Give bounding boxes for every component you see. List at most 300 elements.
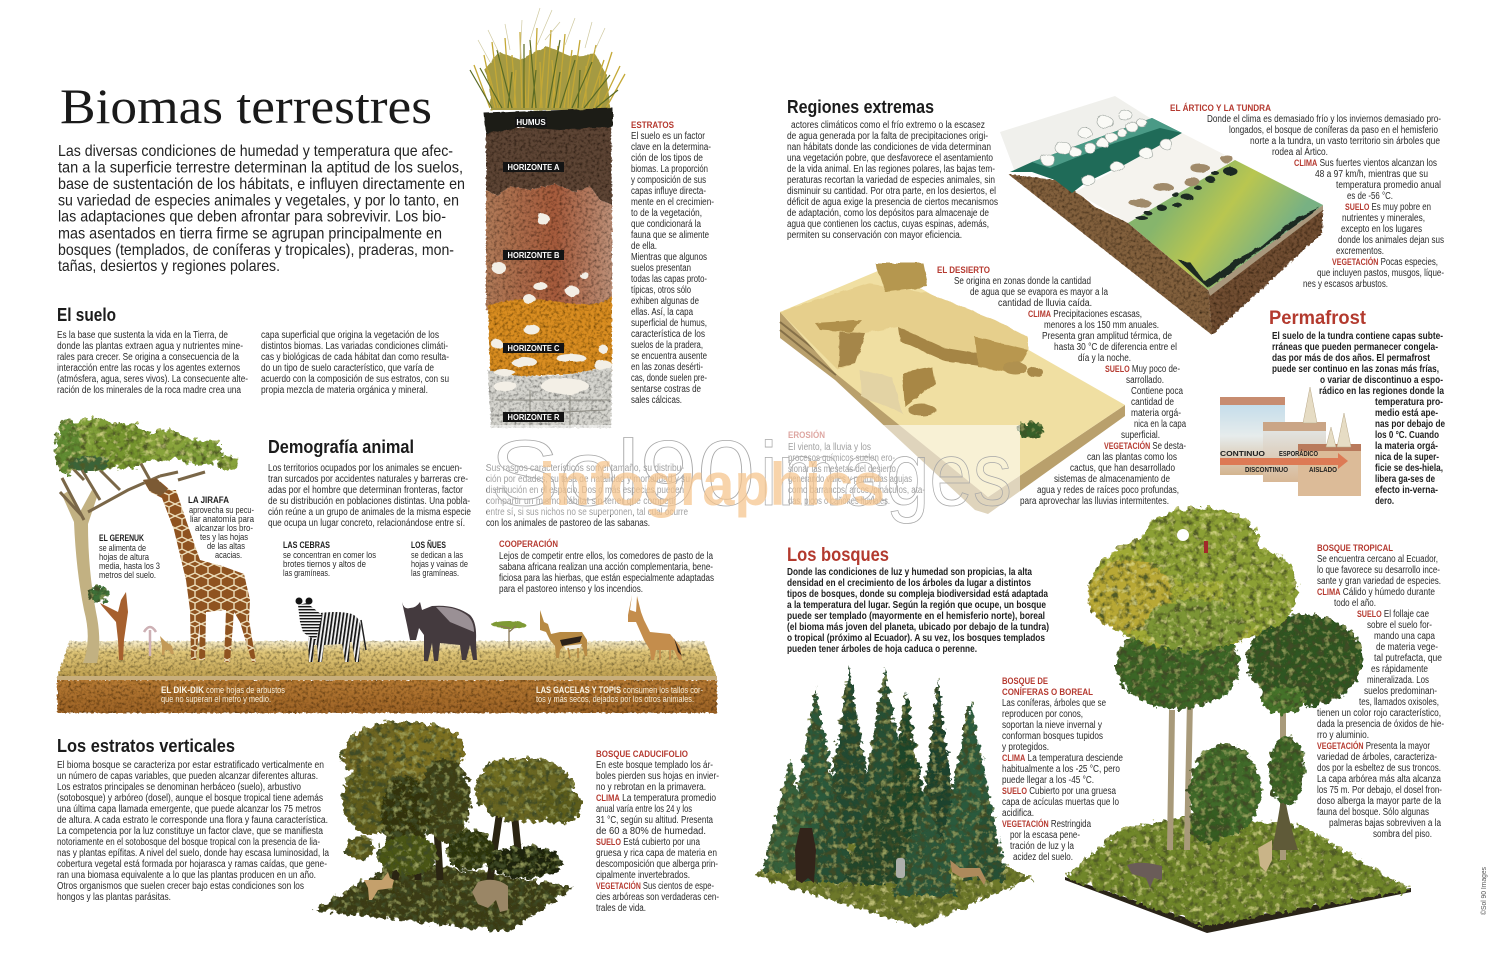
- callout: El Ártico y la tundra: EL ÁRTICO Y LA TUNDRA: [1170, 103, 1271, 113]
- body text: [787, 120, 998, 241]
- text column 2: propia mezcla de materia orgánica y mineral.: [261, 385, 428, 396]
- callout: El Ártico y la tundra: temperatura promedio anual: [1336, 180, 1441, 191]
- callout: bosque caducifolio: no y rebrotan en la primavera.: [596, 782, 706, 793]
- intro text block: mas asentados en tierra firme se agrupan principalmente en: [58, 225, 442, 242]
- foliage: [342, 721, 582, 878]
- soil horizon labels: HORIZONTE A: [508, 163, 560, 172]
- text column 1: (atmósfera, agua, seres vivos). La consecuente alte-: [57, 374, 248, 385]
- intro text block: tan a la superficie terrestre determinan la aptitud de los suelos,: [58, 159, 463, 176]
- callout: bosque de coníferas: soportan la nieve invernal y: [1002, 720, 1102, 731]
- arrow labels: DISCONTINUO: [1245, 465, 1288, 474]
- upper canopy: [1088, 507, 1298, 651]
- icon: jaguar: [1258, 840, 1272, 872]
- callout: Estratos: que condicionará la: [631, 219, 701, 230]
- label: ñues: [411, 540, 468, 578]
- text column 2: [261, 330, 449, 396]
- lower canopy: [1116, 614, 1363, 714]
- callout: El Ártico y la tundra: longados, el bosque de coníferas da paso en el hemisferio: [1229, 125, 1438, 136]
- text column 1: tran surcados por accidentes naturales y barreras cre-: [268, 474, 468, 485]
- callout: bosque de coníferas: [1002, 676, 1123, 863]
- illustration: coniferous forest diorama: [753, 665, 1033, 927]
- base edge: [1065, 877, 1411, 933]
- icon: wildebeest: [402, 602, 477, 661]
- text column 1: ración de los minerales de la roca madre crea una: [57, 385, 241, 396]
- teal band: [1010, 118, 1182, 193]
- conifers: [762, 665, 1007, 895]
- text column 2: capa superficial que origina la vegetación de los: [261, 330, 439, 341]
- callout: bosque tropical: Se encuentra cercano al Ecuador,: [1317, 554, 1438, 565]
- intro text block: bosques (templados, de coníferas y tropicales), praderas, mon-: [58, 242, 454, 259]
- title: Biomas terrestres: [60, 78, 432, 134]
- callout: El desierto: hasta 30 °C de diferencia entre el: [1054, 342, 1177, 353]
- callout: Estratos: se encuentra ausente: [631, 351, 707, 362]
- callout: bosque caducifolio: SUELO Está cubierto por una: [596, 837, 700, 848]
- section: El suelo: [57, 305, 449, 396]
- humus band: [484, 108, 613, 134]
- watermark: [487, 421, 1020, 525]
- label: ñues: las gramíneas.: [411, 568, 459, 578]
- label: giraffe: tes y las hojas: [200, 532, 248, 542]
- heading: Regiones extremas: [787, 97, 934, 117]
- label: giraffe: liar anatomía para: [190, 514, 255, 524]
- heading: Permafrost: [1269, 308, 1367, 329]
- callout: El desierto: Presenta gran amplitud térmica, de: [1042, 331, 1172, 342]
- label: ñues: LOS ÑUES: [411, 540, 446, 550]
- label: ñues: hojas y vainas de: [411, 559, 468, 569]
- callout: bosque caducifolio: En este bosque templado los ár-: [596, 760, 713, 771]
- callout: bosque de coníferas: BOSQUE DE: [1002, 676, 1048, 686]
- body text: notoriamente en el sotobosque del bosque tropical con la presencia de lia-: [57, 837, 320, 848]
- label: cebras: las gramíneas.: [283, 568, 330, 578]
- callout: El desierto: sistemas de almacenamiento de: [1054, 474, 1170, 485]
- body text: una vegetación pobre, que desfavorece el asentamiento: [787, 153, 993, 164]
- text column 1: de su distribución en poblaciones distintas. Una pobla-: [268, 496, 470, 507]
- body text: actores climáticos como el frío extremo o la escasez: [791, 120, 985, 131]
- ground front face: [57, 680, 717, 713]
- ground: [753, 815, 1033, 927]
- soil horizon labels: HORIZONTE C: [508, 344, 560, 353]
- heading: Los estratos verticales: [57, 736, 235, 756]
- section: Permafrost: [1220, 308, 1445, 507]
- body text: La competencia por la luz constituye un factor clave, que se manifiesta: [57, 826, 323, 837]
- text column 2: [486, 463, 690, 529]
- icon: wolf: [896, 858, 905, 878]
- callout: bosque caducifolio: VEGETACIÓN Sus cientos de espe-: [596, 880, 714, 892]
- callout: bosque de coníferas: por la escasa pene-: [1010, 830, 1080, 841]
- label: cebras: LAS CEBRAS: [283, 540, 330, 550]
- boulders and vegetation: [1041, 110, 1320, 288]
- soil horizon labels: HORIZONTE R: [508, 413, 560, 422]
- label: gacelas: consumen los tallos cor-: [623, 685, 703, 695]
- callout: bosque de coníferas: puede llegar a los -45 °C.: [1002, 775, 1094, 786]
- callout: Erosión: como barrancos, arcos, pináculos, ata-: [788, 485, 925, 496]
- icon: small trees: [1303, 387, 1351, 447]
- callout: cooperación: [499, 538, 714, 595]
- callout: cooperación: Lejos de competir entre ellos, los comedores de pasto de la: [499, 551, 713, 562]
- body text: nica de la super-: [1375, 452, 1439, 463]
- callout: bosque caducifolio: anual varía entre los 24 y los: [596, 804, 692, 815]
- callout: bosque tropical: tal putrefacta, que: [1374, 653, 1442, 664]
- body text: un número de capas variables, que pueden alcanzar diferentes alturas.: [57, 771, 318, 782]
- icon: bear: [472, 880, 508, 912]
- callout: bosque tropical: CLIMA Cálido y húmedo durante: [1317, 587, 1435, 598]
- body text: libera ga-ses de: [1375, 474, 1435, 485]
- callout: El Ártico y la tundra: VEGETACIÓN Pocas especies,: [1332, 256, 1438, 268]
- callout: Estratos: suelos presentan: [631, 263, 691, 274]
- illustration: soil profile with grass: [470, 8, 625, 428]
- icon: red parrot: [1204, 541, 1208, 553]
- side faces: [1008, 174, 1212, 335]
- callout: bosque tropical: es rápidamente: [1371, 664, 1428, 675]
- trunks: [395, 780, 520, 880]
- label: cebras: brotes tiernos y altos de: [283, 559, 366, 569]
- callout: Erosión: das, picos o cañones fluviales.: [788, 496, 890, 507]
- body text: temperatura pro-: [1375, 397, 1443, 408]
- illustration: savanna block: [55, 418, 717, 713]
- understory: [1189, 736, 1305, 843]
- callout: El desierto: [937, 265, 1186, 507]
- body text: El suelo de la tundra contiene capas subte-: [1272, 331, 1443, 342]
- callout: bosque tropical: suelos predominan-: [1364, 686, 1437, 697]
- ground: [1065, 815, 1411, 926]
- callout: Estratos: ción de los tipos de: [631, 153, 703, 164]
- intro text block: Las diversas condiciones de humedad y temperatura que afec-: [58, 143, 453, 160]
- text column 2: distribución en el espacio. Dos o más especies pueden: [486, 485, 684, 496]
- body text: cobertura vegetal está formada por hojarasca y ramas caídas, que gene-: [57, 859, 327, 870]
- callout: El desierto: menores a los 150 mm anuales.: [1044, 320, 1159, 331]
- callout: El desierto: sarrollado.: [1126, 375, 1164, 386]
- label: gacelas: tos y más secos, dejados por los otros animales.: [536, 694, 694, 704]
- callout: El Ártico y la tundra: Donde el clima es demasiado frío y los inviernos demasiado pro-: [1207, 114, 1441, 125]
- callout: bosque de coníferas: acidez del suelo.: [1013, 852, 1073, 863]
- text column 1: que ocupa un lugar concreto, relacionándose entre sí.: [268, 518, 465, 529]
- callout: bosque tropical: fauna del bosque. Sólo algunas: [1317, 807, 1429, 818]
- callout: cooperación: para el pastoreo intenso y los incendios.: [499, 584, 643, 595]
- callout: Erosión: EROSIÓN: [788, 429, 825, 440]
- body text: peraturas recortan la variedad de especies animales, sin: [787, 175, 995, 186]
- section: Los estratos verticales: [57, 736, 329, 903]
- text column 1: adas por el hombre que determinan fronteras, factor: [268, 485, 464, 496]
- callout: El desierto: superficial.: [1121, 430, 1160, 441]
- callout: El Ártico y la tundra: rodea al Ártico.: [1272, 145, 1328, 158]
- callout: Estratos: El suelo es un factor: [631, 131, 706, 142]
- callout: bosque de coníferas: y protegidos.: [1002, 742, 1049, 753]
- text column 1: Es la base que sustenta la vida en la Tierra, de: [57, 330, 228, 341]
- callout: cooperación: sabana africana realizan una acción complementaria, bene-: [499, 562, 713, 573]
- callout: El desierto: Contiene poca: [1131, 386, 1183, 397]
- body text: de adaptación, como los depósitos para almacenaje de: [787, 208, 989, 219]
- callout: bosque tropical: dos por la esbeltez de sus troncos.: [1317, 763, 1441, 774]
- body text: o tropical (próximo al Ecuador). A su vez, los bosques templados: [787, 633, 1045, 644]
- white band: [1075, 133, 1235, 223]
- callout: El desierto: día y la noche.: [1078, 353, 1131, 364]
- body text: nas por debajo de: [1375, 419, 1445, 430]
- label: giraffe: aprovecha su pecu-: [189, 505, 254, 515]
- heading: El suelo: [57, 305, 116, 325]
- label: ñues: se dedican a las: [411, 550, 463, 560]
- text column 1: ción reúne a un grupo de animales de la misma especie: [268, 507, 471, 518]
- callout: El desierto: EL DESIERTO: [937, 265, 990, 275]
- callout: El Ártico y la tundra: [1170, 103, 1444, 290]
- text column 2: cas y biológicas de cada hábitat dan como resulta-: [261, 352, 449, 363]
- label: giraffe: alcanzar los bro-: [195, 523, 253, 533]
- icon: gazelle: [540, 610, 587, 658]
- callout: bosque tropical: [1317, 543, 1444, 840]
- label: dik-dik: [161, 685, 285, 704]
- icon: impala: [628, 595, 682, 660]
- callout: bosque caducifolio: BOSQUE CADUCIFOLIO: [596, 749, 688, 759]
- grass: [470, 8, 625, 110]
- section: Regiones extremas: [787, 97, 998, 241]
- intro text block: su variedad de especies animales y vegetales, y por lo tanto, en: [58, 192, 459, 209]
- callout: El Ártico y la tundra: excrementos.: [1336, 246, 1384, 257]
- callout: bosque tropical: BOSQUE TROPICAL: [1317, 543, 1393, 553]
- body text: rráneas que pueden permanecer congela-: [1272, 342, 1438, 353]
- callout: bosque caducifolio: 31 °C, según su altitud. Presenta: [596, 815, 713, 826]
- arrow: [1220, 453, 1348, 469]
- illustration: desert block: [780, 263, 1125, 514]
- callout: Estratos: fauna que se alimente: [631, 230, 709, 241]
- body text: de agua generada por la falta de precipitaciones origi-: [787, 131, 988, 142]
- label: gerenuk: hojas de altura: [99, 552, 150, 562]
- body text: tipos de bosques, donde su compleja biodiversidad está adaptada: [787, 589, 1048, 600]
- snow band: [1000, 96, 1150, 172]
- stones: [491, 213, 612, 394]
- callout: El Ártico y la tundra: excepto en los lugares: [1341, 224, 1422, 235]
- body text: disminuir su cantidad. Por otra parte, en los desiertos, el: [787, 186, 996, 197]
- callout: Estratos: ESTRATOS: [631, 120, 674, 130]
- callout: Erosión: [788, 429, 925, 507]
- callout: bosque tropical: de materia vege-: [1376, 642, 1438, 653]
- callout: El desierto: materia orgá-: [1131, 408, 1181, 419]
- callout: bosque de coníferas: CLIMA La temperatura desciende: [1002, 753, 1123, 764]
- arrow labels: AISLADO: [1309, 465, 1337, 474]
- label: giraffe: [188, 495, 255, 560]
- callout: El desierto: nica en la capa: [1134, 419, 1186, 430]
- callout: Erosión: sionar las mesetas del desierto,: [788, 464, 898, 475]
- callout: Estratos: de ella.: [631, 241, 657, 252]
- callout: Estratos: superficial de humus,: [631, 318, 707, 329]
- body text: una última capa llamada emergente, que puede alcanzar los 75 metros: [57, 804, 321, 815]
- body text: nan hábitats donde las condiciones de vida determinan: [787, 142, 991, 153]
- body text: [787, 567, 1049, 655]
- callout: El desierto: SUELO Muy poco de-: [1105, 364, 1180, 375]
- illustration: deciduous forest diorama: [313, 721, 582, 932]
- text column 1: [57, 330, 248, 396]
- ground top surface: [57, 641, 717, 678]
- soil horizon labels: HORIZONTE B: [508, 251, 560, 260]
- callout: El Ártico y la tundra: es de -56 °C.: [1347, 191, 1393, 202]
- callout: El desierto: CLIMA Precipitaciones escasas,: [1028, 309, 1142, 320]
- watermark: infographics: [539, 451, 885, 518]
- label: gerenuk: EL GERENUK: [99, 533, 144, 543]
- callout: Erosión: El viento, la lluvia y los: [788, 442, 871, 453]
- callout: bosque de coníferas: capa de acículas muertas que lo: [1002, 797, 1119, 808]
- body text: puede ser continuo en las zonas más frías,: [1272, 364, 1439, 375]
- callout: bosque caducifolio: cipalmente invertebrados.: [596, 870, 690, 881]
- intro text block: las adaptaciones que deben afrontar para sobrevivir. Los bio-: [58, 209, 446, 226]
- callout: bosque caducifolio: [596, 749, 719, 914]
- intro text block: [58, 143, 465, 275]
- callout: Estratos: [631, 120, 714, 406]
- ground: [313, 860, 575, 932]
- callout: bosque tropical: tienen un color rojo característico,: [1317, 708, 1441, 719]
- body text: medio está ape-: [1375, 408, 1438, 419]
- callout: bosque de coníferas: acidifica.: [1002, 808, 1034, 819]
- callout: bosque caducifolio: boles pierden sus hojas en invier-: [596, 771, 719, 782]
- callout: El Ártico y la tundra: 48 a 97 km/h, mientras que su: [1315, 169, 1428, 180]
- callout: bosque tropical: los 75 m. Por debajo, el dosel fron-: [1317, 785, 1442, 796]
- intro text block: tañas, desiertos y regiones polares.: [58, 258, 280, 275]
- label: giraffe: de las altas: [207, 541, 245, 551]
- arrow labels: CONTINUO: [1220, 449, 1265, 458]
- callout: bosque tropical: doso alberga la mayor parte de la: [1317, 796, 1441, 807]
- callout: bosque tropical: mando una capa: [1374, 631, 1435, 642]
- callout: bosque caducifolio: gruesa y rica capa de materia en: [596, 848, 717, 859]
- text column 2: con los animales de pastoreo de las sabanas.: [486, 518, 650, 529]
- rock plateaus: [780, 263, 1043, 416]
- body text: agua que contienen los cactus, cuyas espinas, además,: [787, 219, 989, 230]
- soil horizon labels: [503, 117, 564, 422]
- soil horizon labels: HUMUS: [516, 118, 546, 127]
- callout: bosque tropical: tes, llamados oxisoles,: [1359, 697, 1439, 708]
- icon: acacia tree: [55, 418, 238, 663]
- callout: bosque tropical: mineralizada. Los: [1367, 675, 1429, 686]
- body text: ran una biomasa equivalente a lo que las plantas producen en un año.: [57, 870, 316, 881]
- callout: Estratos: suelos de la pradera,: [631, 340, 703, 351]
- arrow labels: ESPORÁDICO: [1279, 449, 1318, 458]
- section: Los bosques: [787, 545, 1049, 655]
- callout: bosque caducifolio: trales de vida.: [596, 903, 646, 914]
- callout: El desierto: agua y redes de raíces poco profundas,: [1037, 485, 1179, 496]
- sand surface: [780, 268, 1125, 497]
- callout: El Ártico y la tundra: SUELO Es muy pobre en: [1345, 202, 1431, 213]
- text column 2: ción por edades, su tasa de natalidad y mortalidad y su: [486, 474, 690, 485]
- icon: peccary: [1127, 863, 1162, 888]
- callout: Estratos: sales cálcicas.: [631, 395, 682, 406]
- callout: bosque caducifolio: cies arbóreas son verdaderas cen-: [596, 892, 719, 903]
- body text: das por más de dos años. El permafrost: [1272, 353, 1431, 364]
- callout: Estratos: to de la vegetación,: [631, 208, 702, 219]
- text column 2: compartir un mismo hábitat sin tener que competir: [486, 496, 677, 507]
- text column 2: acuerdo con la composición de sus estratos, con su: [261, 374, 449, 385]
- callout: bosque tropical: sante y gran variedad de especies.: [1317, 576, 1441, 587]
- text column 1: donde las plantas extraen agua y nutrientes mine-: [57, 341, 243, 352]
- callout: Estratos: capas influye directa-: [631, 186, 706, 197]
- label: gacelas: [536, 685, 703, 704]
- label: dik-dik: que no superan el metro y medio.: [161, 694, 271, 704]
- body text: Otros organismos que suelen crecer bajo estas condiciones son los: [57, 881, 304, 892]
- callout: El Ártico y la tundra: que incluyen pastos, musgos, líque-: [1317, 268, 1444, 279]
- callout: Erosión: generando valles y profundas agujas: [788, 474, 912, 485]
- callout: El desierto: de agua que se evapora es mayor a la: [970, 287, 1108, 298]
- callout: Estratos: ellas. Así, la capa: [631, 307, 693, 318]
- text column 2: distintos biomas. Las variadas condiciones climáti-: [261, 341, 448, 352]
- icon: white birds gap: [1177, 529, 1189, 541]
- callout: bosque tropical: sombra del piso.: [1373, 829, 1432, 840]
- soil layers: [486, 126, 612, 428]
- section: Demografía animal: [268, 437, 714, 595]
- label: cebras: se concentran en comer los: [283, 550, 376, 560]
- body text: pueden tener árboles de hoja caduca o perenne.: [787, 644, 977, 655]
- callout: bosque tropical: La capa arbórea más alta alcanza: [1317, 774, 1441, 785]
- icon: palms: [1018, 422, 1044, 440]
- body text: (el bioma más joven del planeta, ubicado por debajo de la tundra): [787, 622, 1049, 633]
- callout: bosque tropical: palmeras bajas sobreviven a la: [1329, 818, 1441, 829]
- body text: [57, 760, 329, 903]
- heading: Demografía animal: [268, 437, 414, 457]
- callout: Estratos: exhiben algunas de: [631, 296, 699, 307]
- body text: nas y plantas epífitas. A nivel del suelo, donde hay escasa luminosidad, la: [57, 848, 329, 859]
- callout: El Ártico y la tundra: nutrientes y minerales,: [1342, 213, 1425, 224]
- callout: bosque de coníferas: SUELO Cubierto por una gruesa: [1002, 786, 1116, 797]
- callout: El desierto: cantidad de: [1131, 397, 1174, 408]
- heading: Los bosques: [787, 545, 889, 566]
- callout: El Ártico y la tundra: norte a la tundra, un vasto territorio sin árboles que: [1250, 136, 1440, 147]
- callout: El Ártico y la tundra: donde los animales dejan sus: [1338, 235, 1444, 246]
- callout: bosque tropical: variedad de árboles, caracteriza-: [1317, 752, 1437, 763]
- icon: deer: [364, 872, 394, 900]
- callout: bosque tropical: sobre el suelo for-: [1367, 620, 1432, 631]
- body text: rádico en las regiones donde la: [1319, 386, 1444, 397]
- callout: Estratos: mente en el crecimien-: [631, 197, 714, 208]
- label: giraffe: LA JIRAFA: [188, 495, 229, 505]
- watermark: Sol90: [490, 421, 755, 525]
- callout: El desierto: Se origina en zonas donde la cantidad: [954, 276, 1091, 287]
- body text: puede ser templado (mayormente en el hemisferio norte), boreal: [787, 611, 1045, 622]
- green tundra: [1128, 160, 1323, 290]
- body text: hongos y las plantas parásitas.: [57, 892, 171, 903]
- callout: Estratos: característica de los: [631, 329, 705, 340]
- label: gerenuk: se alimenta de: [99, 543, 146, 553]
- callout: Estratos: todas las capas proto-: [631, 274, 707, 285]
- callout: El desierto: para aprovechar las lluvias intermitentes.: [1020, 496, 1169, 507]
- callout: bosque de coníferas: VEGETACIÓN Restringida: [1002, 818, 1091, 830]
- callout: El desierto: can las plantas como los: [1087, 452, 1177, 463]
- callout: El desierto: VEGETACIÓN Se desta-: [1104, 440, 1186, 452]
- watermark: images: [760, 425, 1012, 525]
- body text: El bioma bosque se caracteriza por estar estratificado verticalmente en: [57, 760, 324, 771]
- body text: ficie se des-hiela,: [1375, 463, 1443, 474]
- callout: Estratos: sentarse costras de: [631, 384, 701, 395]
- callout: bosque tropical: dada la presencia de óxidos de hie-: [1317, 719, 1444, 730]
- body text: (sotobosque) y arbóreo (dosel), aunque el bosque tropical tiene además: [57, 793, 323, 804]
- intro text block: base de sustentación de los hábitats, e influyen directamente en: [58, 176, 465, 193]
- callout: bosque tropical: SUELO El follaje cae: [1357, 609, 1429, 620]
- text column 1: [268, 463, 471, 529]
- callout: bosque de coníferas: tración de luz y la: [1010, 841, 1074, 852]
- icon: bear: [795, 828, 816, 883]
- callout: bosque tropical: rro y aluminio.: [1317, 730, 1369, 741]
- body text: los 0 °C. Cuando: [1375, 430, 1439, 441]
- callout: bosque tropical: lo que favorece su desarrollo ince-: [1317, 565, 1440, 576]
- body text: de altura. A cada estrato le corresponde una flora y fauna característica.: [57, 815, 328, 826]
- permafrost diagram: [1220, 387, 1361, 496]
- callout: bosque de coníferas: habitualmente a los -25 °C, pero: [1002, 764, 1120, 775]
- callout: Estratos: Mientras que algunos: [631, 252, 707, 263]
- body text: dero.: [1375, 496, 1394, 507]
- label: dik-dik: EL DIK-DIK: [161, 685, 204, 695]
- icon: dik-dik: [144, 627, 174, 656]
- callout: bosque de coníferas: CONÍFERAS O BOREAL: [1002, 687, 1093, 697]
- label: giraffe: acacias.: [215, 550, 242, 560]
- trunks: [1170, 700, 1283, 860]
- icon: deer: [950, 860, 986, 885]
- callout: Estratos: en las zonas desérti-: [631, 362, 703, 373]
- icon: gerenuk: [89, 586, 128, 660]
- callout: bosque de coníferas: conforman bosques tupidos: [1002, 731, 1103, 742]
- label: gerenuk: metros del suelo.: [99, 570, 156, 580]
